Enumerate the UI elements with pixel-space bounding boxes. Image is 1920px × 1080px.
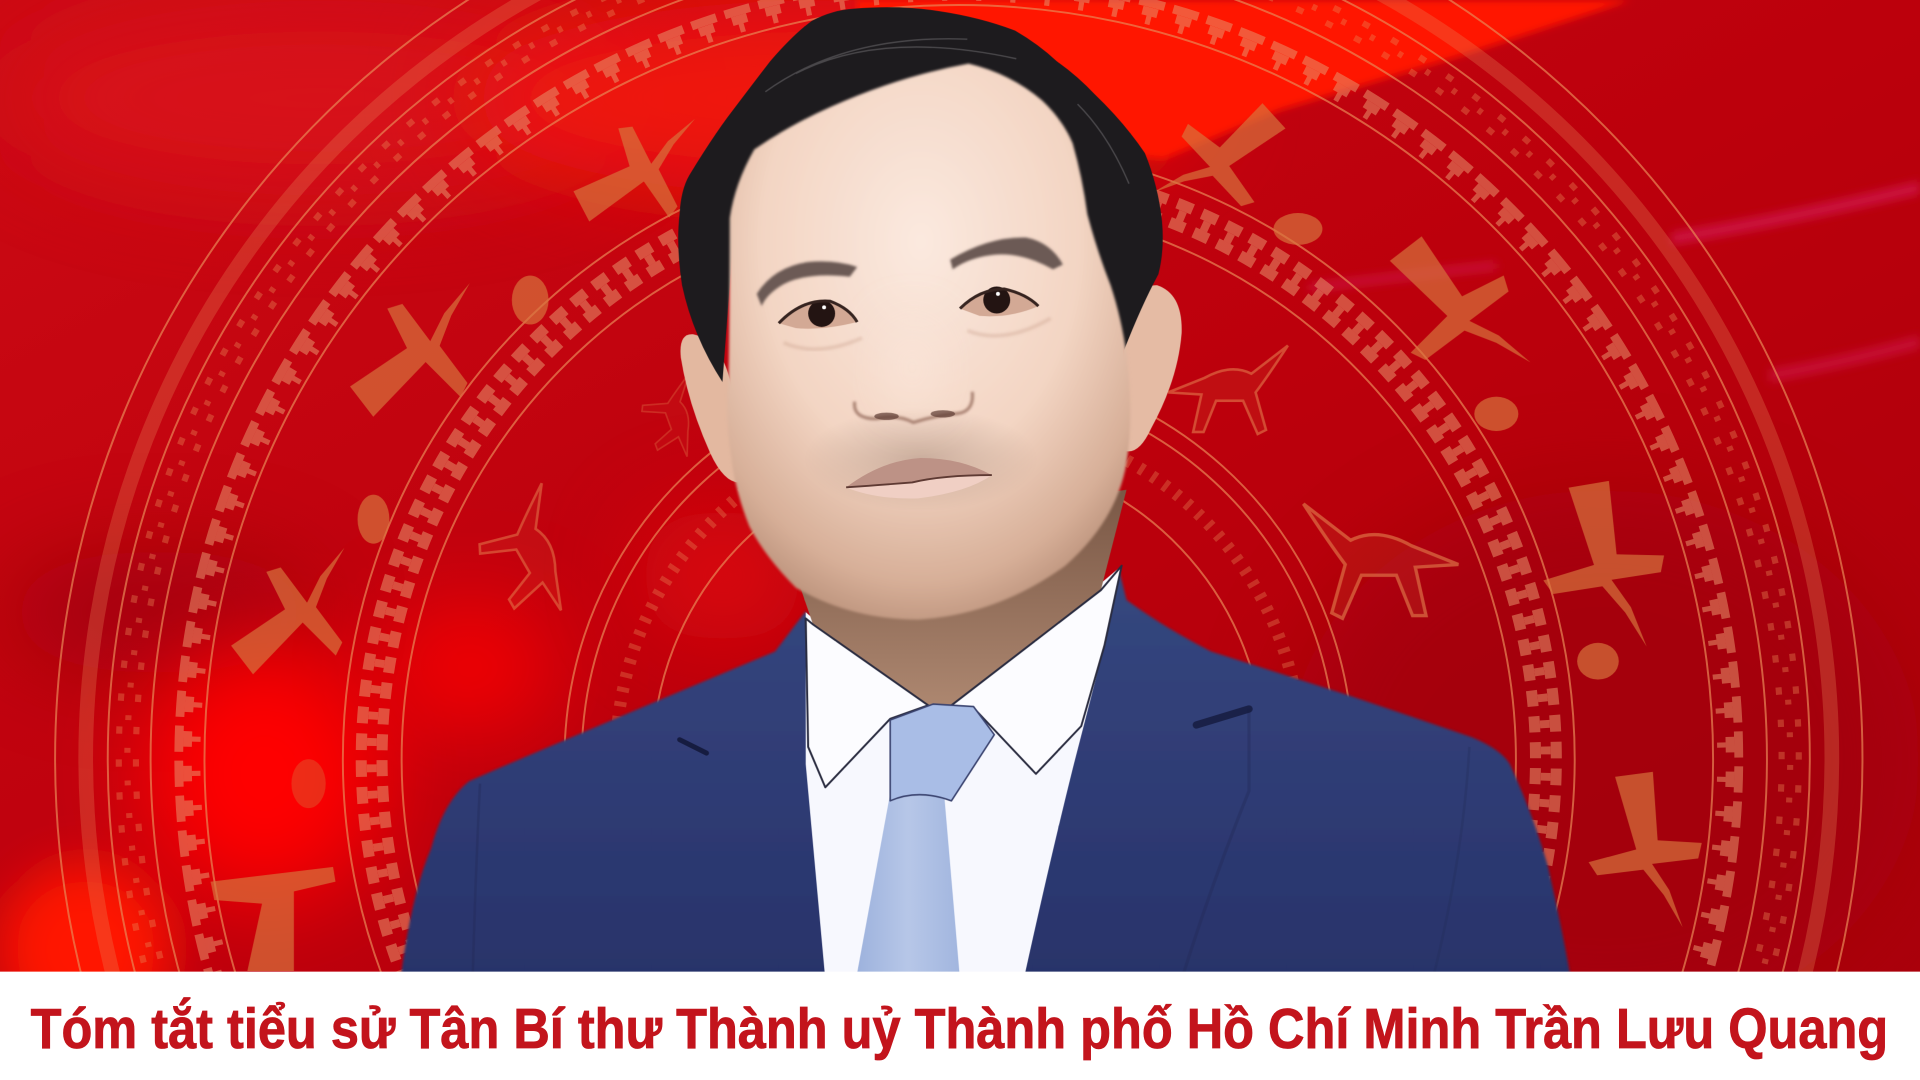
inner pattern band (361, 162, 1556, 1010)
necktie (856, 704, 994, 980)
right eye (960, 287, 1051, 336)
neck (784, 490, 1127, 705)
portrait of Trần Lưu Quang (400, 7, 1571, 980)
nose (854, 321, 972, 422)
shirt collar (806, 566, 1122, 787)
white shirt (806, 566, 1122, 980)
tall bird (211, 867, 336, 971)
face (727, 64, 1130, 620)
left eye (779, 300, 862, 349)
stubble shading (804, 408, 1037, 511)
long-beaked animals (465, 346, 1458, 631)
suit jacket (400, 571, 1571, 980)
mouth (846, 458, 992, 498)
bronze drum motifs (211, 87, 1743, 971)
left eyebrow (757, 261, 857, 306)
hair (678, 7, 1163, 382)
flower motifs (291, 213, 1619, 808)
white caption band (0, 972, 1920, 1080)
right ear (1124, 285, 1182, 451)
triangle band (179, 0, 1739, 993)
innermost band (616, 416, 1302, 992)
right eyebrow (950, 237, 1063, 269)
left ear (680, 334, 742, 483)
